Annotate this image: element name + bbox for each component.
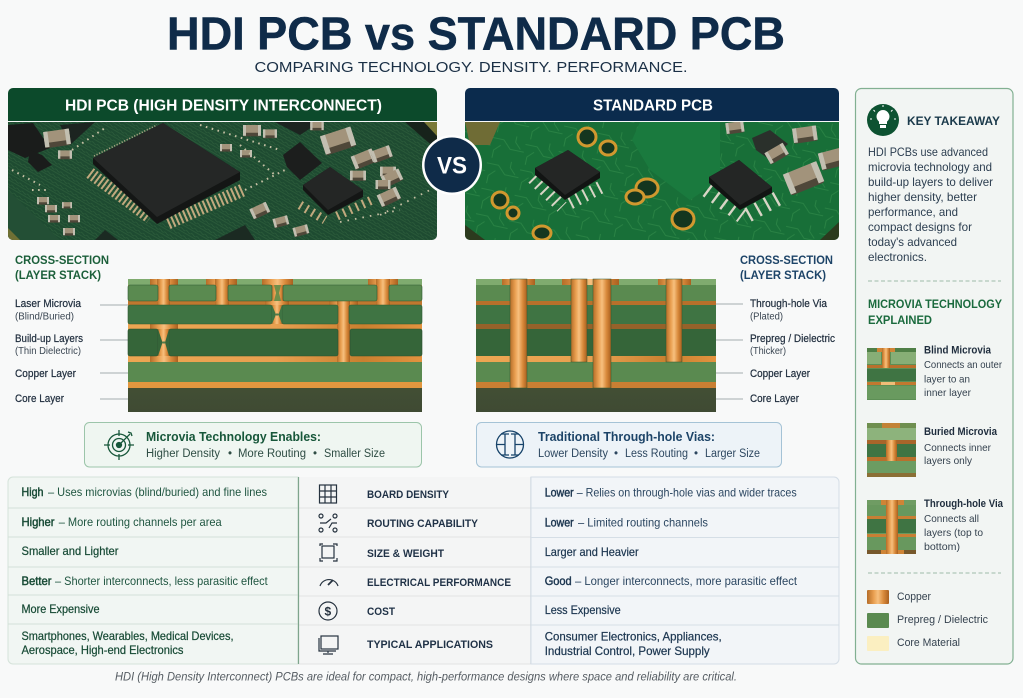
icon: through-hole via <box>496 431 524 458</box>
Standard column: – Relies on through-hole vias and wider traces <box>577 485 797 499</box>
icon: performance gauge <box>320 580 338 586</box>
HDI callout: • <box>313 448 317 460</box>
icon: board density grid <box>320 485 336 503</box>
Standard column <box>531 477 839 664</box>
legend: Copper <box>897 591 931 603</box>
HDI callout: More Routing <box>238 448 306 460</box>
HDI header <box>8 88 437 121</box>
Standard callout: • <box>614 448 618 460</box>
HDI callout <box>84 422 422 467</box>
Standard callout: Lower Density <box>538 448 608 460</box>
icon: target <box>104 430 134 460</box>
Standard circuit board photo <box>465 121 849 240</box>
key takeaway text: electronics. <box>868 250 927 264</box>
HDI column: More Expensive <box>22 602 100 616</box>
HDI layer labels <box>15 298 128 405</box>
HDI cross-section diagram <box>128 279 422 412</box>
Standard header: STANDARD PCB <box>593 98 713 114</box>
Standard cross-section heading <box>740 253 833 282</box>
microvia hourglass details <box>274 285 281 301</box>
Standard layer labels: (Thicker) <box>750 346 786 357</box>
copper vias <box>502 279 691 388</box>
main chip pins <box>90 173 150 218</box>
middle column: ROUTING CAPABILITY <box>367 518 479 530</box>
middle column: TYPICAL APPLICATIONS <box>367 639 493 651</box>
Standard column: Lower <box>545 485 574 499</box>
subtitle: COMPARING TECHNOLOGY. DENSITY. PERFORMANCE. <box>254 59 688 76</box>
blind microvia thumbnail <box>867 348 916 400</box>
dielectric blocks <box>128 285 422 301</box>
Standard column: – Limited routing channels <box>578 516 708 530</box>
microvia heading: EXPLAINED <box>868 313 932 327</box>
blind microvia text: Blind Microvia <box>924 344 992 356</box>
icon: cost dollar: $ <box>324 604 332 618</box>
microvia heading <box>868 297 1002 327</box>
HDI column: Smaller and Lighter <box>22 544 118 558</box>
Standard column: Less Expensive <box>545 603 621 617</box>
HDI column: – Uses microvias (blind/buried) and fine lines <box>48 485 267 499</box>
blind microvia text: Connects an outer <box>924 359 1002 371</box>
HDI circuit board photo <box>8 122 437 240</box>
Standard callout: Larger Size <box>705 448 760 460</box>
VS badge <box>422 135 482 195</box>
HDI column: Better <box>22 574 52 588</box>
key takeaway text: build-up layers to deliver <box>868 175 993 189</box>
chips and pins <box>533 178 605 207</box>
HDI cross-section heading: (LAYER STACK) <box>15 268 101 282</box>
blind microvia text <box>924 344 1002 399</box>
key takeaway text: microvia technology and <box>868 160 992 174</box>
HDI column <box>8 477 298 664</box>
Standard callout: Less Routing <box>625 448 688 460</box>
Standard layer labels: (Plated) <box>750 312 783 322</box>
capacitors <box>43 128 71 148</box>
Standard layer labels: Core Layer <box>750 393 799 405</box>
key takeaway text <box>868 145 993 264</box>
HDI column: Smartphones, Wearables, Medical Devices, <box>22 629 234 643</box>
panel: HDI PCB header and photo <box>8 88 437 240</box>
key takeaway text: performance, and <box>868 205 958 219</box>
Standard column: – Longer interconnects, more parasitic effect <box>575 574 798 588</box>
Standard layer labels <box>716 298 835 405</box>
Standard column: Industrial Control, Power Supply <box>545 644 710 658</box>
through-hole via text: Connects all <box>924 513 979 525</box>
icon: size frame <box>320 544 337 561</box>
HDI column: High <box>22 485 44 499</box>
buried microvia text: Connects inner <box>924 442 991 454</box>
Standard callout <box>476 422 782 467</box>
Standard cross-section heading: (LAYER STACK) <box>740 268 826 282</box>
icon: routing nodes <box>319 514 337 532</box>
legend <box>867 590 988 651</box>
HDI header: HDI PCB (HIGH DENSITY INTERCONNECT) <box>65 98 382 114</box>
HDI column: – More routing channels per area <box>59 515 222 529</box>
capacitors <box>783 161 825 196</box>
Standard column: Larger and Heavier <box>545 545 639 559</box>
footer note: HDI (High Density Interconnect) PCBs are ideal for compact, high-performance designs where space and reliability are critical. <box>115 672 737 684</box>
HDI layer labels: (Blind/Buried) <box>15 312 74 322</box>
HDI column: – Shorter interconnects, less parasitic effect <box>55 574 268 588</box>
HDI cross-section heading: CROSS-SECTION <box>15 253 109 267</box>
comparison table <box>8 477 839 664</box>
buried microvia text: layers only <box>924 455 973 467</box>
middle column: BOARD DENSITY <box>367 489 450 501</box>
HDI layer labels: Build-up Layers <box>15 333 83 345</box>
HDI column: Aerospace, High-end Electronics <box>22 643 184 657</box>
HDI callout: Higher Density <box>146 448 220 460</box>
Standard layer labels: Prepreg / Dielectric <box>750 333 835 345</box>
Standard column: Lower <box>545 516 574 530</box>
HDI callout: • <box>228 448 232 460</box>
Standard header <box>465 88 839 121</box>
Standard callout: • <box>694 448 698 460</box>
HDI callout: Smaller Size <box>324 448 385 460</box>
through-hole via text <box>924 498 1004 553</box>
HDI layer labels: Laser Microvia <box>15 298 82 310</box>
middle column <box>298 477 531 664</box>
HDI layer labels: Core Layer <box>15 393 64 405</box>
Standard column: Good <box>545 574 572 588</box>
key takeaway text: today's advanced <box>868 235 957 249</box>
HDI layer labels: Copper Layer <box>15 368 76 380</box>
key takeaway text: HDI PCBs use advanced <box>868 145 988 159</box>
icon: light bulb <box>867 104 899 136</box>
through-hole via text: Through-hole Via <box>924 498 1004 510</box>
key takeaway heading: KEY TAKEAWAY <box>907 114 1000 128</box>
panel: Standard PCB header and photo <box>465 88 849 240</box>
Standard cross-section heading: CROSS-SECTION <box>740 253 833 267</box>
Standard callout: Traditional Through-hole Vias: <box>538 429 715 444</box>
microvia heading: MICROVIA TECHNOLOGY <box>868 297 1002 311</box>
panel: key takeaway sidebar <box>856 88 1013 664</box>
legend: Prepreg / Dielectric <box>897 614 988 626</box>
buried microvia text <box>924 426 998 467</box>
VS badge: VS <box>437 152 467 180</box>
middle column: ELECTRICAL PERFORMANCE <box>367 577 511 589</box>
key takeaway text: compact designs for <box>868 220 972 234</box>
through-hole via thumbnail <box>867 500 916 554</box>
icon: cost dollar <box>319 602 337 620</box>
Standard layer labels: Copper Layer <box>750 368 810 380</box>
HDI callout: Microvia Technology Enables: <box>146 429 321 444</box>
HDI layer labels: (Thin Dielectric) <box>15 346 81 357</box>
legend: Core Material <box>897 637 960 649</box>
title: HDI PCB vs STANDARD PCB <box>167 8 785 60</box>
Standard cross-section diagram <box>476 279 716 412</box>
plated via rings <box>492 128 694 240</box>
buried microvia thumbnail <box>867 423 916 477</box>
blind microvia text: inner layer <box>924 387 971 399</box>
icon: monitor <box>319 636 338 654</box>
main chip <box>93 123 240 224</box>
small chips <box>283 142 322 180</box>
blind microvia text: layer to an <box>924 374 970 386</box>
Standard column: Consumer Electronics, Appliances, <box>545 630 722 644</box>
HDI cross-section heading <box>15 253 109 282</box>
Standard layer labels: Through-hole Via <box>750 298 828 310</box>
HDI column: Higher <box>22 515 54 529</box>
buried microvia text: Buried Microvia <box>924 426 998 438</box>
middle column: COST <box>367 606 395 618</box>
key takeaway text: higher density, better <box>868 190 977 204</box>
copper vias <box>150 279 398 362</box>
middle column: SIZE & WEIGHT <box>367 548 444 560</box>
through-hole via text: bottom) <box>924 541 960 553</box>
through-hole via text: layers (top to <box>924 527 983 539</box>
